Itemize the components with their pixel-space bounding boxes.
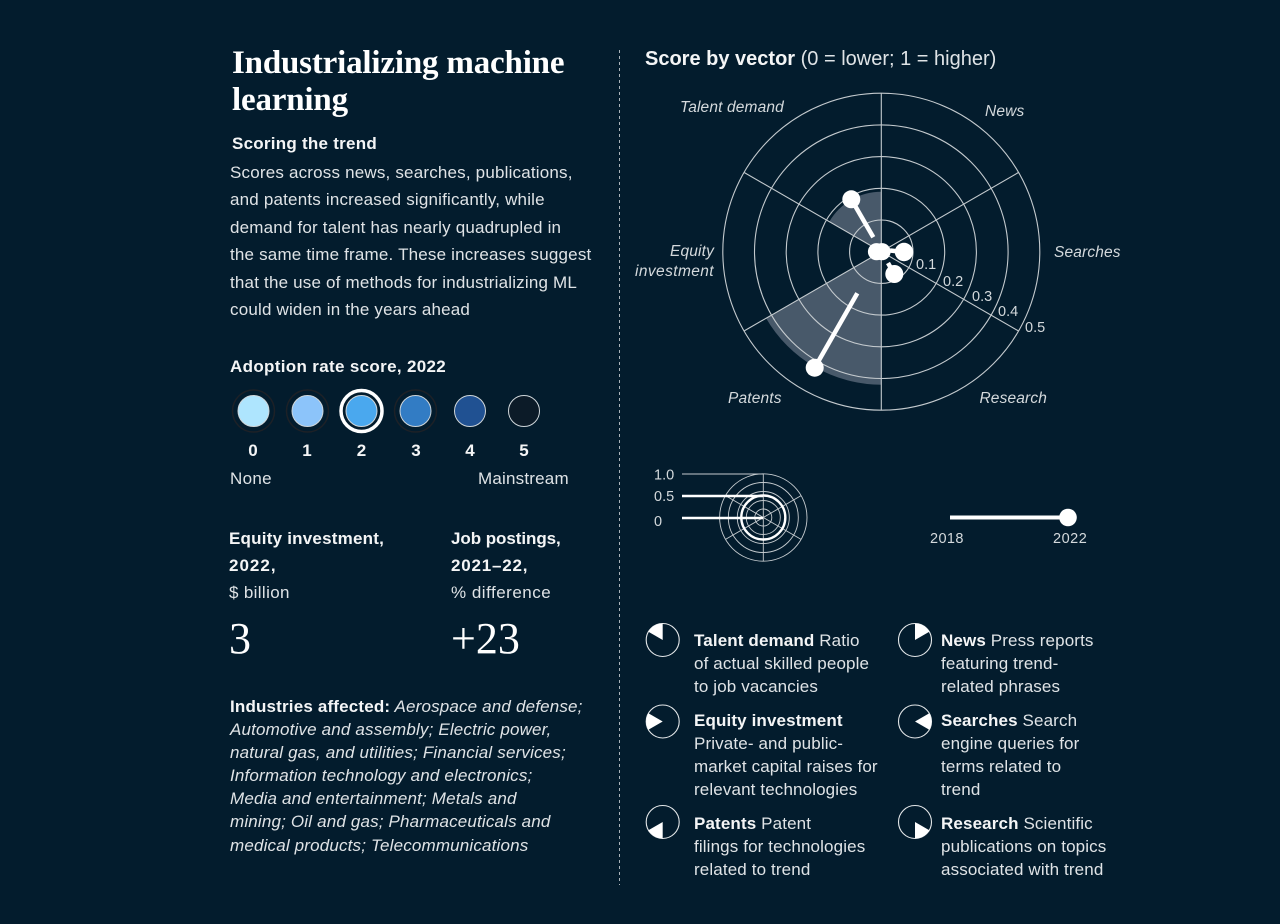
scale labels: 0.5 (1025, 320, 1045, 336)
data: news and equity investment (868, 243, 891, 260)
adoption rate score (230, 357, 569, 488)
industries affected: Industries affected: Aerospace and defense; (230, 697, 583, 716)
data: searches (890, 243, 913, 261)
scale numbers: 1 (302, 441, 312, 460)
axis labels: investment (635, 263, 714, 280)
definition: searches: Searches Search (941, 711, 1077, 730)
definition: research (898, 806, 1106, 879)
scale numbers (248, 441, 529, 460)
definition: equity investment: Equity investment (694, 711, 843, 730)
definition: news (898, 623, 1094, 696)
definition: talent demand: Talent demand Ratio (694, 631, 860, 650)
shaded 2022 wedges (766, 192, 881, 385)
size legend: 0 (654, 514, 662, 530)
axis labels: Equity (670, 243, 715, 260)
definition: news: News Press reports (941, 631, 1094, 650)
description text: that the use of methods for industrializing ML (230, 273, 577, 292)
icon: news wedge (898, 623, 932, 656)
description text: could widen in the years ahead (230, 300, 470, 319)
subheading: Scoring the trend (232, 134, 377, 153)
definition: news: featuring trend- (941, 654, 1058, 673)
definition: equity investment: market capital raises for (694, 757, 878, 776)
scale labels (916, 257, 1045, 336)
definition: research: associated with trend (941, 860, 1103, 879)
adoption scale circles (232, 390, 540, 432)
description text: the same time frame. These increases suggest (230, 245, 592, 264)
adoption heading: Adoption rate score, 2022 (230, 357, 446, 376)
industries affected: Automotive and assembly; Electric power, (229, 720, 551, 739)
definition: talent demand: of actual skilled people (694, 654, 869, 673)
scale labels: 0.3 (972, 289, 992, 305)
definition: news: related phrases (941, 677, 1060, 696)
icon: talent wedge (646, 623, 679, 656)
stat: equity investment (229, 529, 384, 663)
definition: searches: terms related to (941, 757, 1061, 776)
scale labels: 0.2 (943, 274, 963, 290)
scale end labels (230, 469, 569, 488)
scale end labels: Mainstream (478, 469, 569, 488)
data: talent demand (842, 190, 873, 237)
stat: job postings: % difference (451, 583, 551, 602)
industries affected (229, 697, 583, 855)
scale numbers: 4 (465, 441, 475, 460)
definition: equity investment (646, 705, 878, 799)
title: learning (232, 82, 349, 118)
definition: equity investment: relevant technologies (694, 780, 857, 799)
icon: equity wedge (646, 705, 679, 738)
definition: patents: Patents Patent (694, 814, 811, 833)
size legend: 0.5 (654, 489, 674, 505)
time legend: 2022 (1053, 531, 1087, 547)
definition: equity investment: Private- and public- (694, 734, 843, 753)
data: patents (806, 293, 857, 377)
icon: searches wedge (898, 705, 932, 738)
grid (723, 93, 1040, 410)
stat: equity investment: 2022, (229, 556, 277, 575)
time legend: 2018 (930, 531, 964, 547)
chart heading: Score by vector (0 = lower; 1 = higher) (645, 48, 996, 70)
definition: searches: engine queries for (941, 734, 1080, 753)
definition: patents (646, 806, 865, 879)
icon: research wedge (898, 806, 932, 838)
title: Industrializing machine (232, 45, 564, 81)
scale end labels: None (230, 469, 272, 488)
definition: talent demand: to job vacancies (694, 677, 818, 696)
industries affected: Media and entertainment; Metals and (230, 789, 517, 808)
small polar grid (720, 474, 807, 561)
stat: job postings: +23 (451, 614, 520, 663)
axis labels (635, 99, 1121, 407)
data: research (885, 263, 903, 283)
description text (230, 163, 592, 319)
definition: research: Research Scientific (941, 814, 1093, 833)
size legend: 1.0 (654, 468, 674, 484)
scale labels: 0.1 (916, 257, 936, 273)
industries affected: Information technology and electronics; (230, 766, 533, 785)
description text: Scores across news, searches, publications, (230, 163, 573, 182)
radar chart (635, 93, 1121, 410)
stat: job postings: Job postings, (451, 529, 561, 548)
axis labels: Talent demand (680, 99, 785, 116)
industries affected: natural gas, and utilities; Financial services; (230, 743, 566, 762)
stat: equity investment: Equity investment, (229, 529, 384, 548)
definition: patents: filings for technologies (694, 837, 865, 856)
axis labels: Searches (1054, 244, 1121, 261)
scale numbers: 2 (357, 441, 366, 460)
definition: searches: trend (941, 780, 980, 799)
definition: research: publications on topics (941, 837, 1106, 856)
definition: searches (898, 705, 1080, 799)
axis labels: News (985, 103, 1024, 120)
stat: job postings: 2021–22, (451, 556, 528, 575)
industries affected: medical products; Telecommunications (230, 836, 529, 855)
definition: patents: related to trend (694, 860, 810, 879)
stat: job postings (451, 529, 561, 663)
description text: demand for talent has nearly quadrupled in (230, 218, 561, 237)
scale numbers: 3 (411, 441, 421, 460)
axis labels: Research (979, 390, 1047, 407)
description text: and patents increased significantly, while (230, 190, 545, 209)
scale numbers: 0 (248, 441, 258, 460)
title (232, 45, 564, 118)
stat: equity investment: 3 (229, 614, 251, 663)
time legend (930, 509, 1087, 547)
scale labels: 0.4 (998, 304, 1018, 320)
icon: patents wedge (646, 806, 679, 838)
industries affected: mining; Oil and gas; Pharmaceuticals and (230, 812, 551, 831)
stat: equity investment: $ billion (229, 583, 290, 602)
scale numbers: 5 (519, 441, 529, 460)
size legend (654, 468, 807, 561)
axis labels: Patents (728, 390, 782, 407)
definition: talent demand (646, 623, 869, 696)
